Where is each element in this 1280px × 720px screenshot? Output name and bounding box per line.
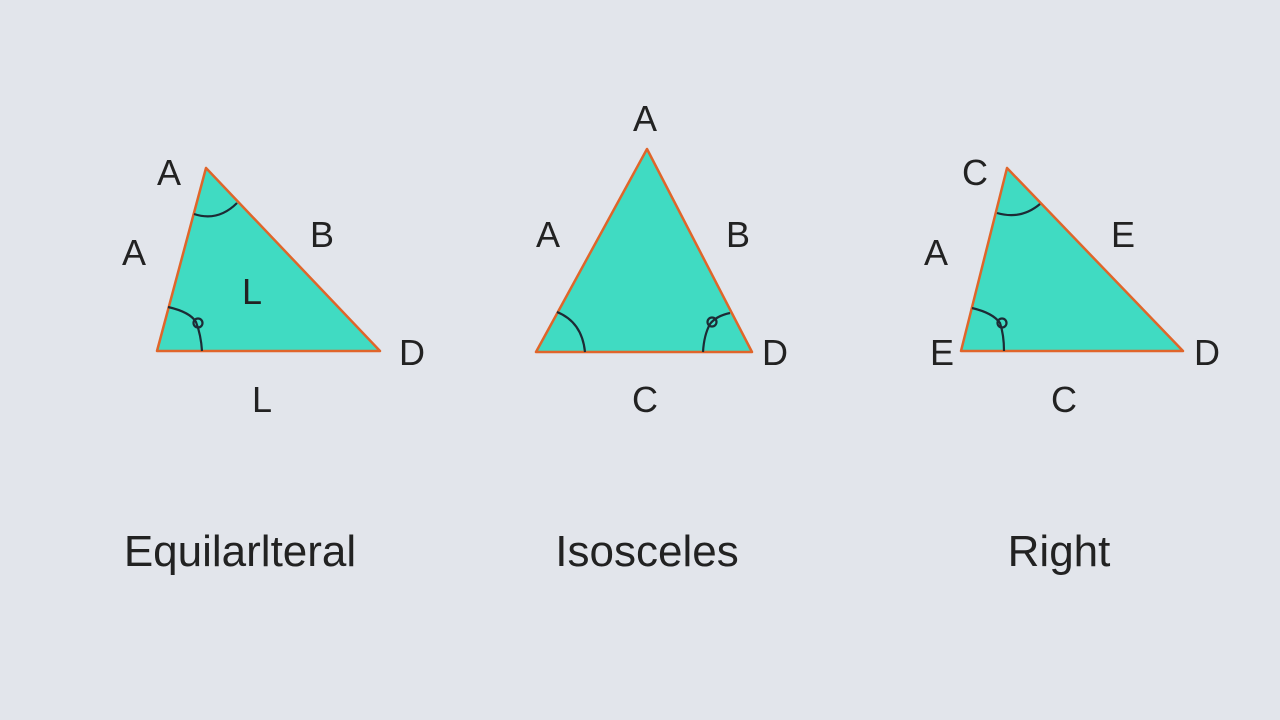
labels right: A [924,232,948,273]
panel: isosceles [536,98,788,420]
angle arcs right [972,204,1040,351]
labels isosceles [536,98,788,420]
panel: equilateral [122,152,425,420]
panel: right [924,152,1220,420]
labels equilateral [122,152,425,420]
captions: Isosceles [555,527,739,576]
labels equilateral: A [122,232,146,273]
labels equilateral: A [157,152,181,193]
labels right: E [930,332,954,373]
labels isosceles: C [632,379,658,420]
labels equilateral: D [399,332,425,373]
labels equilateral: L [242,271,262,312]
labels right [924,152,1220,420]
triangle: right [961,168,1183,351]
labels equilateral: L [252,379,272,420]
angle arcs isosceles [557,312,730,352]
captions: Right [1008,527,1110,576]
labels isosceles: A [536,214,560,255]
labels isosceles: A [633,98,657,139]
labels isosceles: D [762,332,788,373]
angle arcs equilateral [168,203,237,351]
labels right: C [1051,379,1077,420]
labels right: C [962,152,988,193]
triangle: isosceles [536,149,752,352]
captions: Equilarlteral [124,527,356,576]
labels right: D [1194,332,1220,373]
captions [124,527,1110,576]
labels isosceles: B [726,214,750,255]
labels right: E [1111,214,1135,255]
labels equilateral: B [310,214,334,255]
triangle: equilateral [157,168,380,351]
